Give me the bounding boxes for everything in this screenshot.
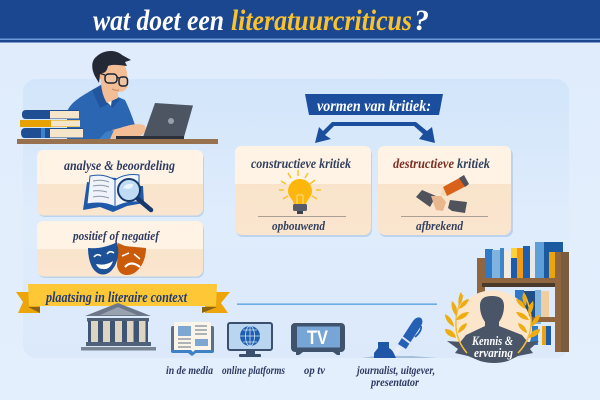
icon: theatre masks <box>88 242 146 275</box>
icon: classical building <box>81 303 156 350</box>
badge: kennis en ervaring: Kennis & <box>471 334 513 348</box>
card: positief of negatief: positief of negatief <box>72 228 160 243</box>
media labels: presentator <box>370 377 419 389</box>
laptop <box>116 103 193 139</box>
silhouette <box>458 296 530 345</box>
icon: fountain pen and ink <box>362 317 437 358</box>
illustration: critic at desk <box>17 51 218 144</box>
card: constructieve kritiek: opbouwend <box>272 218 325 233</box>
icon: television <box>291 323 345 355</box>
stack of books <box>20 110 83 138</box>
laurel left <box>445 292 469 353</box>
header band <box>0 0 600 42</box>
badge: kennis en ervaring: ervaring <box>474 346 513 360</box>
card: positief of negatief <box>37 221 204 278</box>
badge: kennis en ervaring <box>445 290 540 363</box>
main background panel <box>23 79 569 358</box>
media labels <box>166 365 435 389</box>
card: destructieve kritiek <box>378 146 513 237</box>
media labels: in de media <box>166 365 213 377</box>
icon: breaking pencil <box>416 175 469 213</box>
icon: television: TV <box>307 328 328 349</box>
card: analyse en beoordeling: analyse & beoordeling <box>64 158 175 173</box>
ribbon: plaatsing in literaire context <box>16 284 230 313</box>
media labels: journalist, uitgever, <box>355 365 435 377</box>
ribbon: plaatsing in literaire context: plaatsing in literaire context <box>44 290 188 306</box>
title: ? <box>414 4 429 37</box>
title <box>93 4 429 37</box>
card: constructieve kritiek: constructieve kritiek <box>251 156 351 171</box>
card: analyse en beoordeling <box>37 150 204 217</box>
laurel right <box>516 292 540 353</box>
media labels: op tv <box>304 365 326 377</box>
divider line <box>237 304 437 305</box>
icon: open book with magnifier <box>83 175 151 212</box>
bookshelf <box>477 242 569 352</box>
icon: monitor with globe <box>228 323 272 357</box>
icon: light bulb <box>279 170 321 214</box>
icon: newspaper media <box>171 322 214 356</box>
person <box>67 51 145 139</box>
desk <box>17 139 218 144</box>
card: constructieve kritiek <box>235 146 372 237</box>
banner: vormen van kritiek: vormen van kritiek: <box>317 98 431 115</box>
arrows to critique types <box>315 122 435 143</box>
title: literatuurcriticus <box>231 4 412 37</box>
card: destructieve kritiek: kritiek <box>457 156 490 171</box>
card: destructieve kritiek: destructieve <box>393 156 454 171</box>
media labels: online platforms <box>222 365 285 377</box>
ribbon base <box>447 338 539 363</box>
card: destructieve kritiek: afbrekend <box>416 218 463 233</box>
title: wat doet een <box>93 4 224 37</box>
